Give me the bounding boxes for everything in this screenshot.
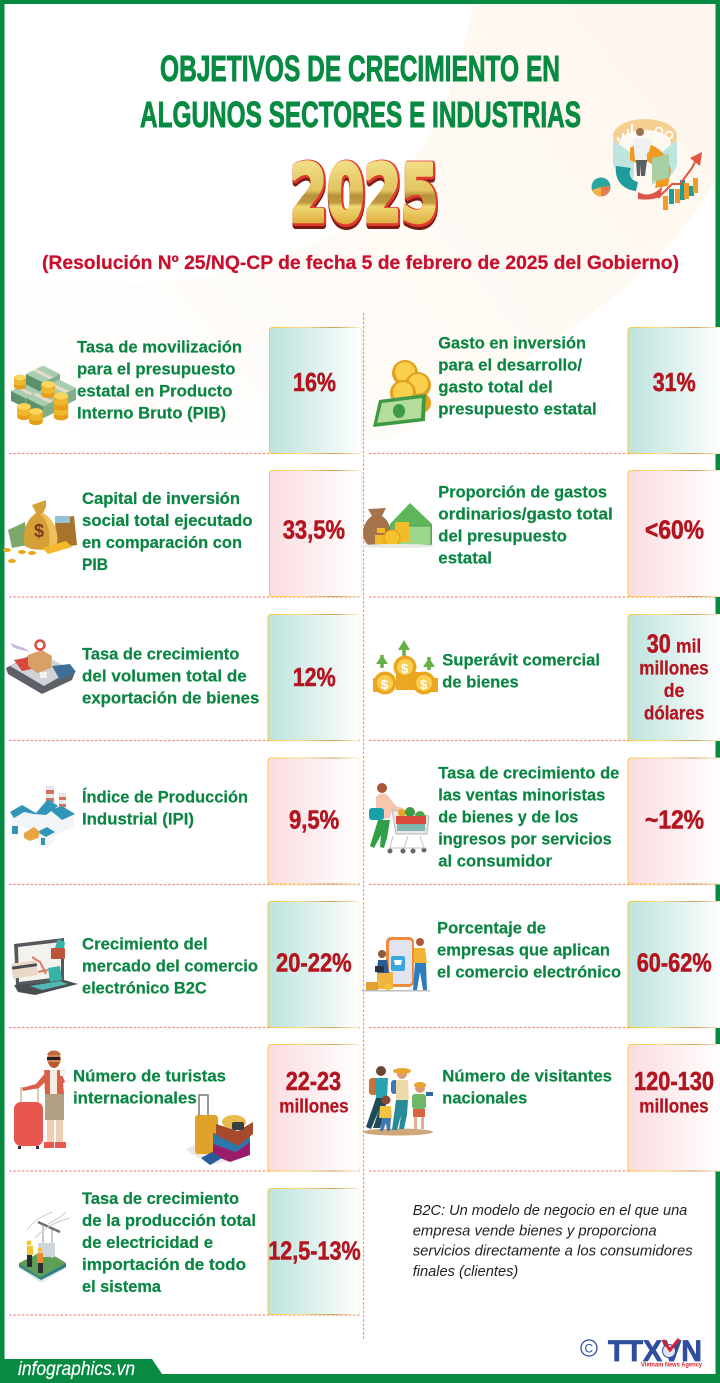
value box: 12% — [293, 662, 336, 692]
label: del volumen total de — [82, 666, 247, 685]
label: mercado del comercio — [82, 956, 258, 975]
icon: logistics platform — [6, 640, 76, 694]
label — [438, 333, 597, 418]
label: ingresos por servicios — [438, 830, 612, 849]
label: Tasa de crecimiento — [82, 644, 239, 663]
panel: proporción de gastos — [359, 470, 720, 596]
label: Interno Bruto (PIB) — [77, 403, 226, 422]
panel: exportación de bienes — [6, 614, 360, 740]
panel: turistas internacionales — [14, 1044, 360, 1171]
label: Industrial (IPI) — [82, 810, 194, 829]
value box: 12,5-13% — [268, 1235, 361, 1265]
panel: superávit comercial — [373, 614, 720, 740]
label: ordinarios/gasto total — [438, 505, 613, 524]
label — [442, 1067, 612, 1108]
note: B2C definition: finales (clientes) — [413, 1263, 518, 1280]
value box: dólares — [644, 703, 704, 724]
label: Número de turistas — [73, 1067, 226, 1086]
value box — [268, 1044, 360, 1171]
logo: TTXVN: TTXVN — [608, 1335, 702, 1368]
year 2025: 2025 — [291, 154, 439, 244]
icon: bag, banknotes and coins — [359, 503, 435, 548]
icon: coins with up arrows: $ — [401, 661, 409, 676]
icon: money stacks — [11, 366, 76, 425]
value box — [628, 902, 720, 1028]
panel: capital de inversión — [3, 470, 362, 596]
label — [82, 1189, 256, 1296]
icon: coins and banknote — [373, 360, 431, 427]
icon: power line workers — [19, 1212, 70, 1283]
value box: ~12% — [645, 804, 704, 834]
label — [437, 919, 621, 982]
label: en comparación con — [82, 533, 242, 552]
label: gasto total del — [438, 377, 553, 396]
label: Tasa de crecimiento de — [438, 764, 619, 783]
label: estatal en Producto — [77, 381, 232, 400]
panel: índice de producción industrial — [10, 758, 360, 884]
year 2025 — [290, 150, 439, 244]
icon: coins with up arrows: $ — [381, 677, 389, 692]
subtitle: (Resolución Nº 25/NQ-CP de fecha 5 de febrero de 2025 del Gobierno) — [42, 252, 679, 274]
note: B2C definition: servicios directamente a los consumidores — [413, 1243, 693, 1260]
value box: millones — [639, 1097, 709, 1118]
value box: 9,5% — [289, 804, 339, 834]
label: estatal — [438, 549, 492, 568]
value box: 16% — [293, 367, 336, 397]
label: empresas que aplican — [437, 941, 610, 960]
label: internacionales — [73, 1089, 197, 1108]
icon: data analysis illustration — [592, 119, 702, 210]
label — [82, 788, 248, 829]
value box: millones — [639, 659, 709, 680]
value box: <60% — [645, 514, 704, 544]
value box — [628, 470, 720, 596]
icon: money bag and gold — [3, 500, 77, 563]
label: para el desarrollo/ — [438, 355, 582, 374]
icon: traveller with suitcase — [14, 1050, 66, 1149]
label: Porcentaje de — [437, 919, 546, 938]
label — [73, 1067, 226, 1108]
label — [438, 764, 619, 871]
label: exportación de bienes — [82, 688, 259, 707]
label — [442, 650, 600, 691]
label: Crecimiento del — [82, 934, 208, 953]
label: presupuesto estatal — [438, 399, 597, 418]
label: Superávit comercial — [442, 650, 600, 669]
value box — [628, 1044, 720, 1171]
value box — [270, 328, 362, 454]
value box — [628, 328, 720, 454]
value box — [628, 614, 720, 740]
label: Número de visitantes — [442, 1067, 612, 1086]
icon: factory — [10, 786, 75, 848]
icon: laptop with online shopping — [11, 938, 78, 995]
value box: 30 — [647, 629, 671, 659]
note: B2C definition — [413, 1202, 693, 1280]
label: importación de todo — [82, 1255, 246, 1274]
dashed grid — [9, 313, 716, 1340]
label — [438, 483, 613, 568]
note: B2C definition: empresa vende bienes y proporciona — [413, 1222, 657, 1239]
value box: 31% — [653, 367, 696, 397]
logo: TTXVN: Vietnam News Agency — [641, 1362, 703, 1368]
background shape — [5, 4, 716, 440]
footer tab: infographics.vn — [18, 1359, 135, 1380]
label: nacionales — [442, 1089, 527, 1108]
label: de la producción total — [82, 1211, 256, 1230]
label: PIB — [82, 555, 108, 574]
footer tab — [0, 1359, 720, 1383]
value box: millones — [279, 1097, 349, 1118]
logo: TTXVN: C — [584, 1342, 594, 1356]
label — [82, 644, 259, 707]
label: las ventas minoristas — [438, 786, 605, 805]
label: de bienes y de los — [438, 808, 578, 827]
value box: de — [664, 681, 684, 702]
label: el sistema — [82, 1277, 162, 1296]
icon: shopper with cart — [369, 783, 429, 854]
label — [82, 934, 258, 997]
value box: 33,5% — [283, 514, 345, 544]
label: de electricidad e — [82, 1233, 213, 1252]
icon: luggage pile — [186, 1095, 253, 1165]
label: Índice de Producción — [82, 788, 248, 807]
panel: visitantes nacionales — [363, 1044, 720, 1171]
value box: 22-23 — [286, 1066, 341, 1096]
value box: mil — [676, 637, 701, 658]
panel: tasa de movilización — [11, 328, 362, 454]
panel: ventas minoristas — [369, 758, 720, 884]
title — [140, 48, 581, 135]
label: al consumidor — [438, 852, 552, 871]
label: Tasa de movilización — [77, 337, 242, 356]
label: social total ejecutado — [82, 511, 252, 530]
note: B2C definition: B2C: Un modelo de negocio en el que una — [413, 1202, 687, 1219]
label — [82, 489, 252, 574]
value box — [268, 758, 360, 884]
year 2025: 2025 — [290, 150, 438, 240]
value box — [268, 614, 360, 740]
label: del presupuesto — [438, 527, 567, 546]
label: de bienes — [442, 672, 519, 691]
icon: family hiking — [363, 1066, 433, 1136]
label: Gasto en inversión — [438, 333, 586, 352]
value box — [268, 1188, 361, 1314]
value box — [270, 470, 362, 596]
label: Tasa de crecimiento — [82, 1189, 239, 1208]
label — [77, 337, 242, 422]
icon: coins with up arrows — [373, 640, 438, 694]
label: electrónico B2C — [82, 978, 207, 997]
label: el comercio electrónico — [437, 963, 621, 982]
label: Proporción de gastos — [438, 483, 607, 502]
icon: coins with up arrows: $ — [420, 677, 428, 692]
value box: 20-22% — [276, 948, 352, 978]
panel: comercio electrónico B2C — [11, 902, 360, 1028]
panel: empresas comercio electrónico — [362, 902, 720, 1028]
value box — [628, 758, 720, 884]
panel: gasto en inversión — [373, 328, 720, 454]
icon: money bag and gold: $ — [34, 521, 44, 541]
icon: phone shop with people — [362, 937, 430, 992]
label: para el presupuesto — [77, 359, 236, 378]
label: Capital de inversión — [82, 489, 240, 508]
panel: electricidad — [19, 1188, 361, 1314]
value box — [268, 902, 360, 1028]
year 2025: 2025 — [291, 151, 439, 241]
